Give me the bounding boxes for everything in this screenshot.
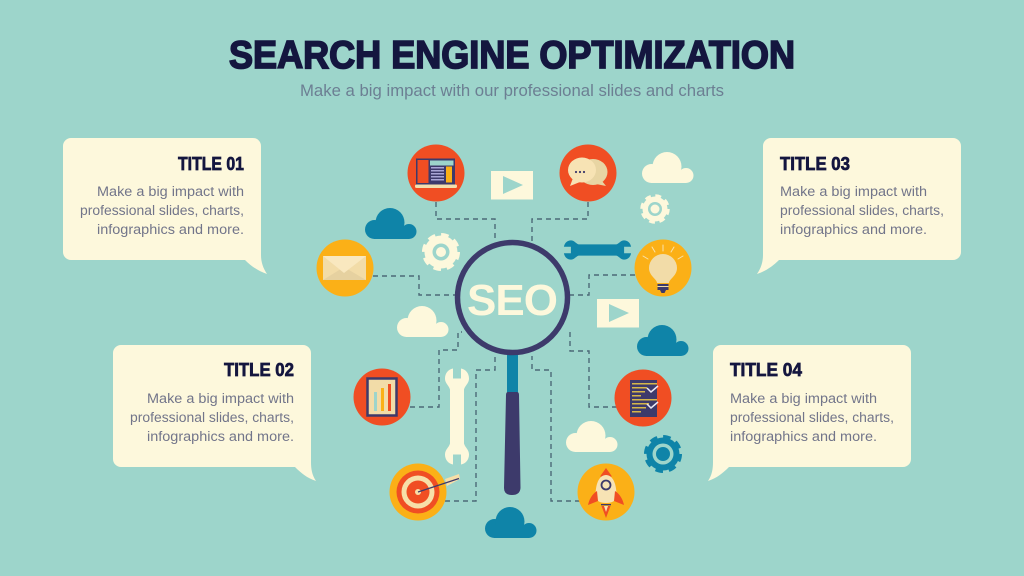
- heading: TITLE 01: [178, 153, 244, 174]
- panel: title 02: [113, 345, 316, 481]
- heading: TITLE 03: [780, 153, 850, 174]
- body text: [730, 391, 894, 444]
- icon: cream cloud lower right: [566, 421, 618, 452]
- icon: cream gear left: [424, 235, 458, 269]
- panel: title 03: [757, 138, 961, 274]
- handle: [504, 392, 520, 495]
- icon: laptop: [408, 144, 464, 202]
- icon: rocket: [578, 464, 634, 520]
- icon: cream wrench: [445, 368, 469, 464]
- body text: Make a big impact with: [147, 391, 294, 406]
- body text: infographics and more.: [730, 429, 877, 444]
- icon: chat bubbles: [560, 144, 616, 202]
- body text: [130, 391, 294, 444]
- body text: Make a big impact with: [97, 184, 244, 199]
- speech bubble: [708, 345, 911, 481]
- body text: [780, 184, 944, 237]
- icon: small cream gear: [642, 196, 668, 222]
- speech bubble: [757, 138, 961, 274]
- icon: envelope: [316, 240, 374, 296]
- heading: TITLE 02: [224, 359, 294, 380]
- body text: professional slides, charts,: [130, 410, 294, 425]
- subtitle: Make a big impact with our professional slides and charts: [300, 82, 724, 100]
- body text: Make a big impact with: [730, 391, 877, 406]
- body text: professional slides, charts,: [80, 203, 244, 218]
- magnifying glass: [458, 242, 568, 495]
- body text: Make a big impact with: [780, 184, 927, 199]
- icon: video card right: [597, 299, 639, 328]
- panel: title 04: [708, 345, 911, 481]
- speech bubble: [63, 138, 267, 274]
- icon: teal gear: [646, 437, 680, 471]
- dashed connectors: [373, 202, 635, 501]
- icon: checklist document: [614, 370, 672, 426]
- body text: infographics and more.: [97, 222, 244, 237]
- icon: light bulb: [634, 240, 692, 296]
- body text: [80, 184, 244, 237]
- icon: teal cloud bottom: [485, 507, 536, 538]
- panel: title 01: [63, 138, 267, 274]
- body text: professional slides, charts,: [730, 410, 894, 425]
- body text: infographics and more.: [780, 222, 927, 237]
- speech bubble: [113, 345, 316, 481]
- icon: teal cloud right: [637, 325, 688, 356]
- icon: bar chart tablet: [354, 368, 410, 426]
- icon: cream cloud upper right: [642, 152, 694, 183]
- heading: TITLE 04: [730, 359, 803, 380]
- neck: [507, 354, 518, 394]
- icon: teal cloud upper left: [365, 208, 416, 239]
- icon: video card top: [491, 171, 533, 200]
- title: SEARCH ENGINE OPTIMIZATION: [229, 34, 795, 77]
- icon: cream cloud left: [397, 306, 448, 337]
- body text: infographics and more.: [147, 429, 294, 444]
- icon: teal wrench: [564, 240, 631, 260]
- body text: professional slides, charts,: [780, 203, 944, 218]
- icon: target with arrow: [390, 464, 460, 520]
- lens ring: [458, 242, 568, 352]
- SEO label: SEO: [467, 276, 558, 325]
